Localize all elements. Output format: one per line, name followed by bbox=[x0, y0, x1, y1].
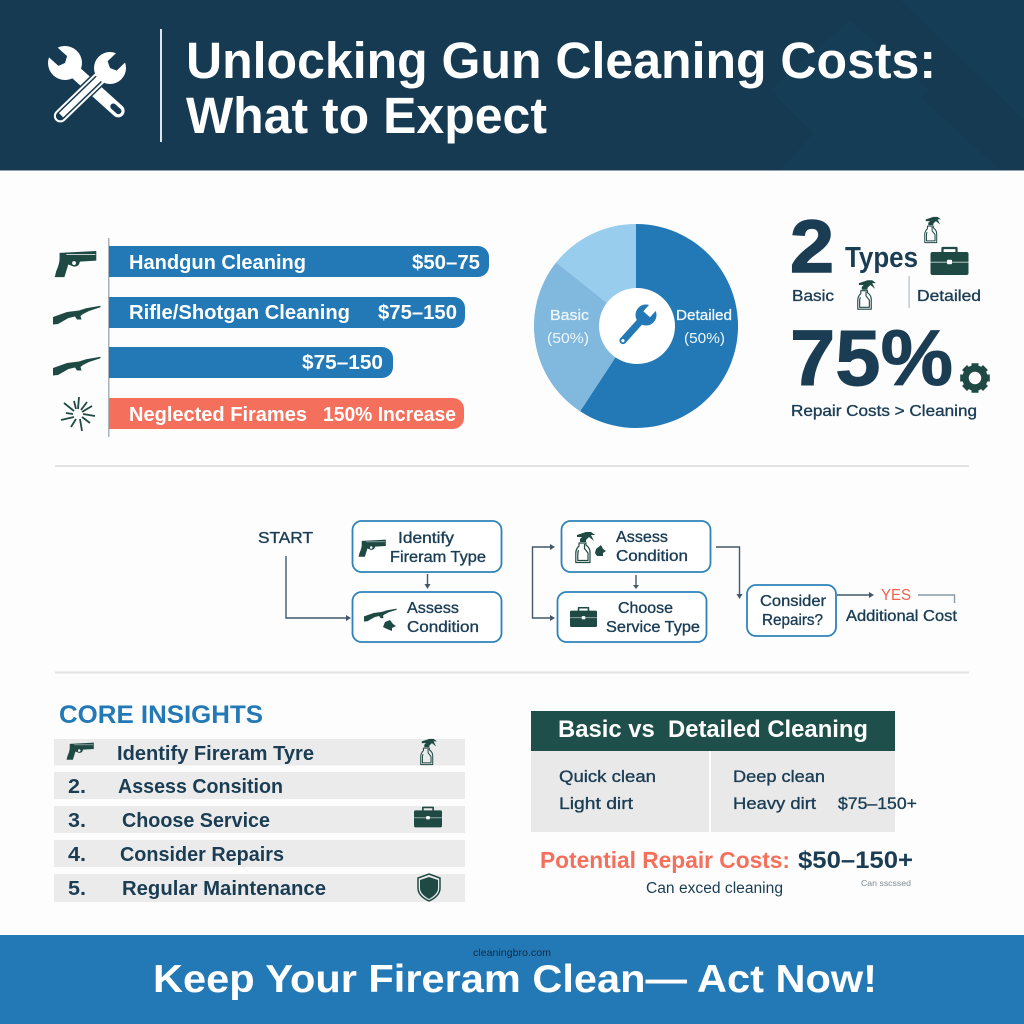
icon: burst bbox=[61, 397, 95, 431]
arrow: branch connector bbox=[532, 544, 555, 621]
step: identify firearm type bbox=[352, 521, 502, 572]
row 5: 5. bbox=[68, 878, 86, 900]
icon: gear bbox=[954, 357, 996, 399]
footer banner bbox=[0, 935, 1024, 1024]
label: detailed bbox=[676, 307, 732, 347]
row 3: 3. bbox=[68, 810, 86, 832]
bar: neglected firearms: 150% Increase bbox=[323, 404, 456, 426]
caption: repair costs: Repair Costs > Cleaning bbox=[791, 403, 977, 420]
title bbox=[186, 32, 936, 144]
column: basic: Light dirt bbox=[559, 794, 633, 813]
panel: core insights bbox=[54, 701, 465, 902]
label: detailed: (50%) bbox=[684, 330, 725, 347]
table header bbox=[531, 711, 895, 751]
title: Unlocking Gun Cleaning Costs: bbox=[186, 32, 936, 89]
column: detailed: Heavy dirt bbox=[733, 794, 816, 813]
row 1 bbox=[54, 739, 465, 766]
callout: potential repair costs: Potential Repair Costs: bbox=[540, 847, 790, 873]
step: assess condition: Assess bbox=[407, 600, 459, 617]
callout: potential repair costs: $50–150+ bbox=[798, 847, 913, 874]
row 4: Consider Repairs bbox=[120, 844, 284, 866]
column: basic bbox=[531, 751, 709, 832]
label: basic: Basic bbox=[550, 307, 590, 324]
stat: 75 percent bbox=[790, 313, 996, 420]
step: consider repairs: Consider bbox=[760, 593, 826, 610]
source credit: cleaningbro.com bbox=[473, 947, 551, 959]
icon: toolbox bbox=[930, 248, 968, 275]
bar chart: cleaning costs bbox=[53, 238, 489, 437]
bar: handgun cleaning: $50–75 bbox=[412, 252, 480, 274]
icon: small spray bottle bbox=[925, 217, 941, 243]
step: choose service type: Choose bbox=[618, 600, 673, 617]
row 1: Identify Fireram Tyre bbox=[117, 743, 314, 765]
label: basic bbox=[547, 307, 590, 347]
bar: rifle and shotgun cleaning bbox=[109, 297, 465, 328]
bar: unlabeled cost: $75–150 bbox=[302, 352, 383, 374]
step: assess condition with spray: Condition bbox=[616, 548, 688, 565]
label: basic: (50%) bbox=[547, 330, 589, 347]
step: identify firearm type: Identify bbox=[398, 530, 454, 547]
call to action: Keep Your Fireram Clean— Act Now! bbox=[153, 958, 877, 1001]
step: assess condition with spray: Assess bbox=[616, 529, 668, 546]
icon: shotgun bbox=[53, 357, 100, 376]
icon: crossed wrenches bbox=[37, 36, 136, 133]
arrow: assess to choose bbox=[633, 575, 639, 589]
label: basic: Basic bbox=[792, 288, 834, 305]
comparison table bbox=[531, 711, 917, 832]
column: detailed: Deep clean bbox=[733, 767, 825, 786]
icon: handgun bbox=[55, 251, 96, 277]
stat: 2 types: 2 bbox=[790, 205, 834, 288]
bar: rifle and shotgun cleaning: Rifle/Shotgan Cleaning bbox=[129, 302, 350, 324]
step: choose service type bbox=[558, 592, 706, 642]
label: yes: YES bbox=[881, 587, 911, 604]
step: choose service type: Service Type bbox=[606, 619, 700, 636]
bar: handgun cleaning: Handgun Cleaning bbox=[129, 252, 306, 274]
stat: 2 types: Types bbox=[845, 242, 918, 274]
step: consider repairs bbox=[747, 585, 836, 636]
icon: wrench bbox=[613, 299, 662, 350]
row 5: Regular Maintenance bbox=[122, 878, 326, 900]
heading: CORE INSIGHTS bbox=[59, 701, 263, 729]
column: detailed: $75–150+ bbox=[838, 794, 917, 813]
bar: handgun cleaning bbox=[109, 246, 489, 277]
bar axis bbox=[108, 238, 110, 437]
step: consider repairs: Repairs? bbox=[762, 612, 823, 629]
row 2 bbox=[54, 772, 465, 799]
arrow: assess to repairs bbox=[716, 547, 742, 599]
row 2: Assess Consition bbox=[118, 776, 283, 798]
row 5 bbox=[54, 874, 465, 902]
step: identify firearm type: Fireram Type bbox=[390, 549, 486, 566]
icon: spray bottle bbox=[858, 280, 876, 309]
arrow: identify to assess bbox=[424, 574, 430, 589]
step: assess condition: Condition bbox=[407, 619, 479, 636]
icon: rifle bbox=[53, 306, 100, 324]
header banner bbox=[0, 0, 1024, 171]
callout: potential repair costs bbox=[540, 847, 913, 897]
label: detailed: Detailed bbox=[917, 288, 981, 305]
bar: rifle and shotgun cleaning: $75–150 bbox=[378, 302, 457, 324]
arrow: repairs to yes bbox=[837, 592, 874, 598]
label: additional cost: Additional Cost bbox=[846, 608, 958, 625]
arrow: start to assess bbox=[286, 556, 351, 621]
step: assess condition bbox=[352, 592, 502, 642]
callout: potential repair costs: Can exced cleaning bbox=[646, 880, 783, 897]
row 4: 4. bbox=[68, 844, 86, 866]
bar: unlabeled cost bbox=[109, 347, 393, 378]
stat: 2 types bbox=[790, 205, 981, 309]
flowchart bbox=[258, 521, 958, 642]
row 2: 2. bbox=[68, 776, 86, 798]
start label: START bbox=[258, 530, 313, 547]
title: What to Expect bbox=[186, 87, 547, 144]
connector: yes to additional cost bbox=[918, 595, 954, 603]
row 4 bbox=[54, 840, 465, 867]
step: assess condition with spray bbox=[562, 521, 710, 572]
bar: neglected firearms bbox=[109, 398, 464, 429]
bar: neglected firearms: Neglected Firames bbox=[129, 404, 307, 426]
callout: potential repair costs: Can sscssed bbox=[861, 879, 911, 888]
label: detailed: Detailed bbox=[676, 307, 732, 324]
stat: 75 percent: 75% bbox=[790, 313, 953, 402]
row 3: Choose Service bbox=[122, 810, 270, 832]
table header: Basic vs Detailed Cleaning bbox=[558, 716, 868, 743]
column: detailed bbox=[711, 751, 917, 832]
pie chart: basic vs detailed bbox=[534, 224, 738, 428]
row 3 bbox=[54, 806, 465, 833]
column: basic: Quick clean bbox=[559, 767, 656, 786]
